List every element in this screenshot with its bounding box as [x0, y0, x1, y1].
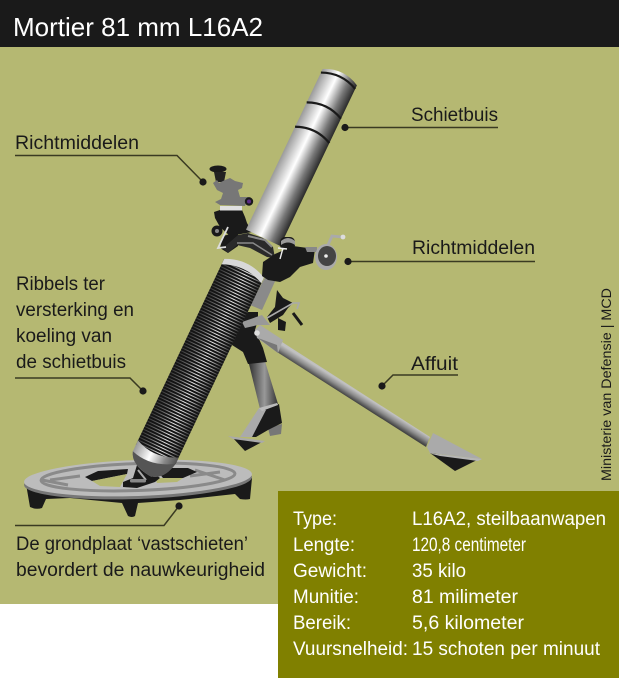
label: Affuit: Affuit [411, 354, 459, 375]
label: Richtmiddelen left: Richtmiddelen [15, 133, 139, 154]
bipod strut [254, 325, 482, 471]
label: Ribbels: Ribbels ter [16, 274, 106, 295]
label: Affuit [378, 354, 459, 390]
label: Schietbuis: Schietbuis [411, 105, 498, 126]
barrel clamp [218, 227, 275, 258]
upper barrel [246, 64, 359, 246]
spec panel [278, 491, 619, 678]
spec panel: Bereik: [293, 613, 351, 634]
spec panel: Gewicht: [293, 561, 367, 582]
spec panel: 15 schoten per minuut [412, 639, 601, 660]
label: Ribbels: de schietbuis [16, 352, 126, 373]
label: Ribbels: versterking en [16, 300, 134, 321]
label: Schietbuis [341, 105, 498, 131]
spec panel: L16A2, steilbaanwapen [412, 509, 606, 530]
label: Richtmiddelen left [15, 133, 207, 186]
label: grondplaat [15, 502, 265, 581]
traversing mechanism [262, 235, 345, 282]
label: grondplaat: De grondplaat ‘vastschieten’ [16, 534, 248, 555]
spec panel: 35 kilo [412, 561, 466, 582]
spec panel: 5,6 kilometer [412, 613, 525, 634]
baseplate [23, 456, 253, 517]
label: grondplaat: bevordert de nauwkeurigheid [16, 560, 265, 581]
credit: Ministerie van Defensie | MCD [598, 288, 614, 481]
label: Ribbels: koeling van [16, 326, 112, 347]
ribbed barrel [126, 254, 266, 484]
label: Ribbels [15, 274, 147, 395]
label: Richtmiddelen right: Richtmiddelen [412, 238, 535, 259]
spec panel: Munitie: [293, 587, 359, 608]
spec panel: Lengte: [293, 535, 355, 556]
title bar [0, 0, 619, 47]
bipod leg [228, 358, 282, 451]
baseplate socket [123, 465, 160, 488]
label: Richtmiddelen right [344, 238, 535, 265]
spec panel: 81 milimeter [412, 587, 519, 608]
illustration: mortar [23, 64, 482, 517]
spec panel: 120,8 centimeter [412, 535, 527, 556]
title: Mortier 81 mm L16A2 [13, 12, 263, 42]
spec panel: Type: [293, 509, 337, 530]
spec panel: Vuursnelheid: [293, 639, 408, 660]
sight [210, 166, 253, 236]
elevating mechanism [225, 274, 302, 364]
